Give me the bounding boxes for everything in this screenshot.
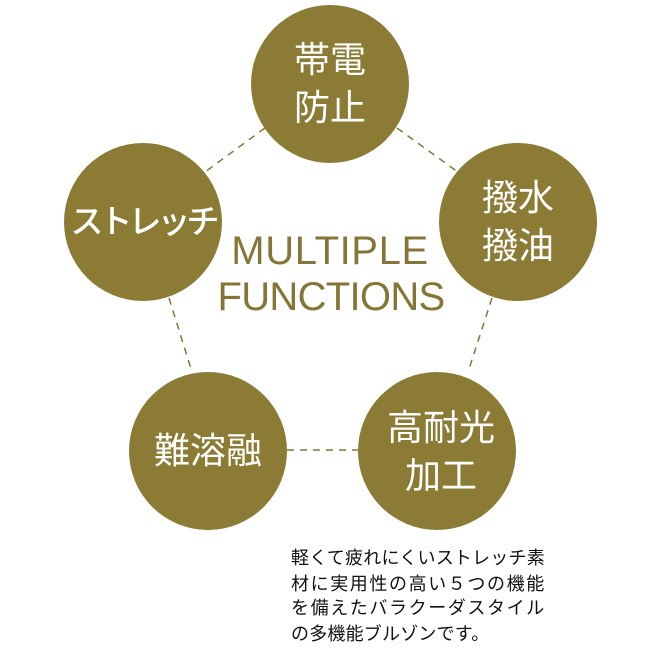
description text — [291, 548, 546, 644]
circle: stretch: ストレッチ — [70, 203, 216, 240]
heading: multiple functions: FUNCTIONS — [217, 275, 445, 319]
circle: water and oil repellent: 撥水 — [482, 177, 554, 218]
heading: multiple functions: MULTIPLE — [231, 229, 429, 273]
circle: anti-static — [251, 5, 409, 163]
description text: の多機能ブルゾンです。 — [291, 624, 489, 644]
circle: anti-static: 防止 — [294, 87, 366, 128]
circle: water and oil repellent: 撥油 — [482, 225, 554, 266]
description text: 軽くて疲れにくいストレッチ素 — [291, 548, 545, 568]
circle: flame resistant — [129, 372, 287, 530]
description text: を備えたバラクーダスタイル — [291, 598, 546, 618]
description text: 材に実用性の高い５つの機能 — [291, 574, 546, 594]
circle: stretch — [64, 143, 222, 301]
heading: multiple functions — [217, 229, 445, 319]
circle: light-resistant finish — [358, 372, 516, 530]
circle: light-resistant finish: 高耐光 — [387, 407, 495, 448]
circle: anti-static: 帯電 — [294, 39, 366, 80]
circle: flame resistant: 難溶融 — [154, 430, 262, 471]
circle: water and oil repellent — [439, 143, 597, 301]
circle: light-resistant finish: 加工 — [405, 455, 477, 496]
